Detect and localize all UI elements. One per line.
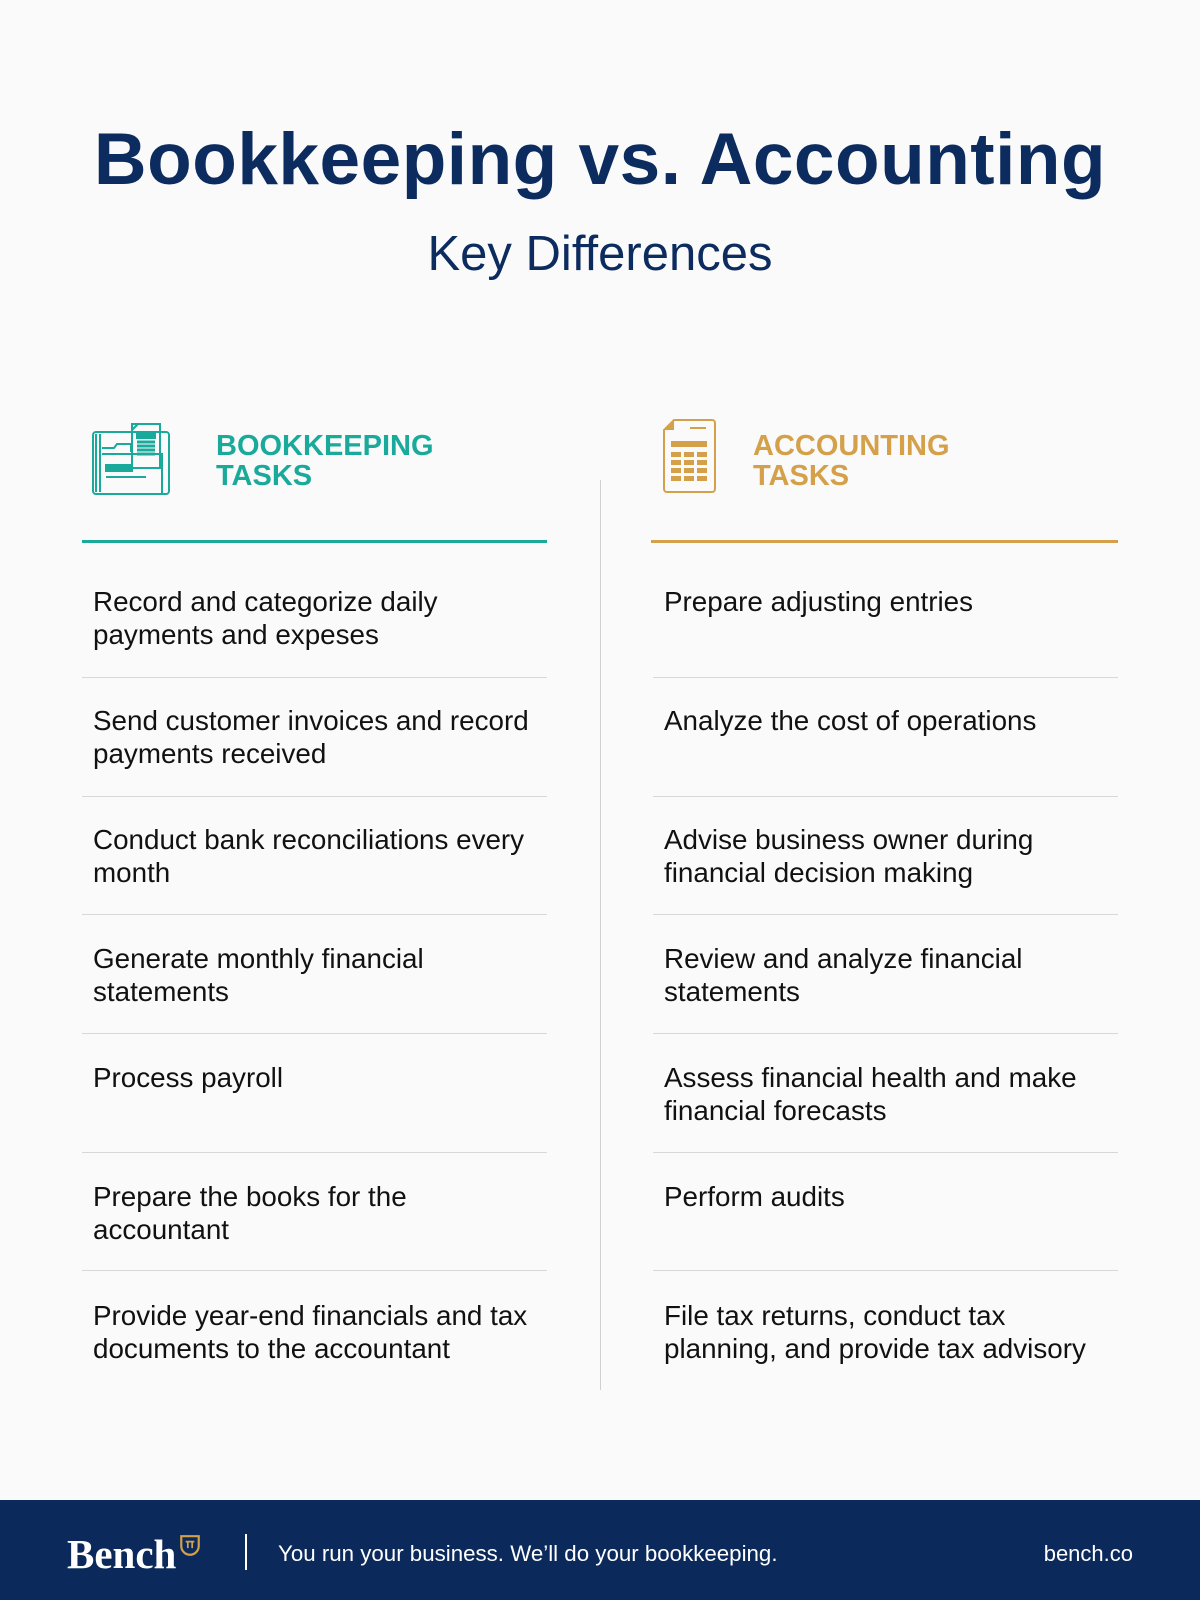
heading: bookkeeping tasks: TASKS xyxy=(216,460,312,492)
heading: bookkeeping tasks: BOOKKEEPING xyxy=(216,430,434,462)
right column list: Advise business owner during xyxy=(664,824,1033,855)
left column list: payments and expeses xyxy=(93,618,379,650)
icon: calculator document xyxy=(663,419,716,493)
left column list: Record and categorize daily xyxy=(93,586,438,617)
tagline: You run your business. We’ll do your bookkeeping. xyxy=(278,1541,778,1566)
heading: accounting tasks: TASKS xyxy=(753,460,849,492)
left column list: Conduct bank reconciliations every month xyxy=(93,824,524,888)
left column list: accountant xyxy=(93,1214,229,1244)
heading: bookkeeping tasks xyxy=(216,430,434,492)
left column list: statements xyxy=(93,976,229,1006)
right column list: planning, and provide tax advisory xyxy=(664,1332,1086,1364)
icon: folder with calculator xyxy=(92,423,170,495)
left column list: Provide year-end financials and tax documents to the accountant xyxy=(93,1300,527,1364)
left column list: Process payroll xyxy=(93,1062,283,1093)
left column list: Send customer invoices and record payments received xyxy=(93,705,529,768)
heading: accounting tasks: ACCOUNTING xyxy=(753,430,950,462)
footer xyxy=(0,1500,1200,1600)
left column list: Prepare the books for the xyxy=(93,1181,407,1212)
left column list xyxy=(82,586,547,1364)
right column list: financial decision making xyxy=(664,856,973,888)
right column list xyxy=(653,586,1118,1364)
heading: accounting tasks xyxy=(753,430,950,492)
title: Bookkeeping vs. Accounting xyxy=(94,119,1106,200)
right column list: File tax returns, conduct tax xyxy=(664,1300,1005,1331)
right column list: Analyze the cost of operations xyxy=(664,705,1036,736)
logo: Bench: Bench xyxy=(67,1531,176,1577)
right column list: Perform audits xyxy=(664,1181,845,1212)
subtitle: Key Differences xyxy=(428,227,772,281)
right column list: Prepare adjusting entries xyxy=(664,586,973,617)
right column list: Review and analyze financial xyxy=(664,943,1022,974)
url: bench.co xyxy=(1044,1541,1133,1566)
left column list: Generate monthly financial xyxy=(93,943,424,974)
right column list: Assess financial health and make xyxy=(664,1062,1077,1093)
right column list: financial forecasts xyxy=(664,1094,886,1126)
right column list: statements xyxy=(664,976,800,1006)
